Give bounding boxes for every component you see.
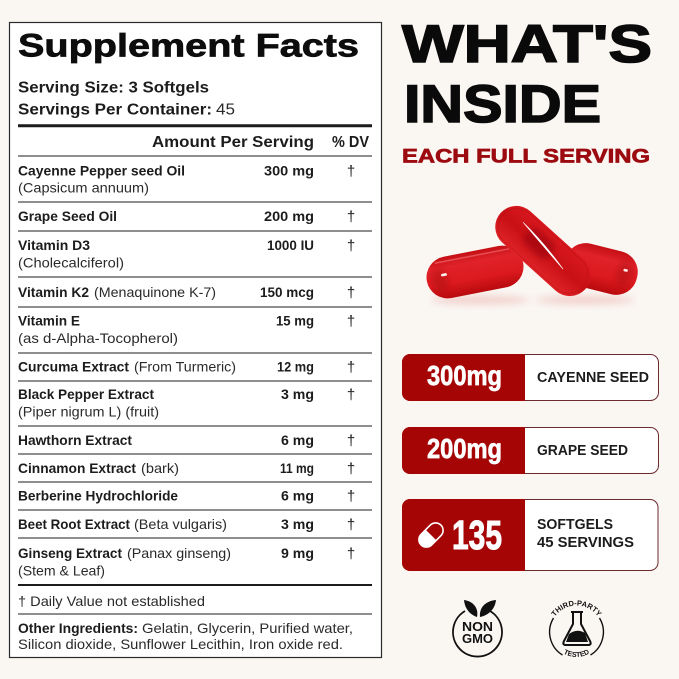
heading: Supplement Facts: Supplement Facts <box>18 28 359 64</box>
stat badge: 135 softgels 45 servings: SOFTGELS <box>537 517 613 533</box>
row: hawthorn extract: 6 mg <box>281 432 314 448</box>
table column headers: % DV <box>332 134 370 151</box>
heading: What's Inside <box>402 15 652 134</box>
row: ginseng extract: † <box>347 546 355 562</box>
panel: supplement facts <box>10 22 382 658</box>
row: ginseng extract: (Stem & Leaf) <box>18 562 105 578</box>
row: vitamin d3: (Cholecalciferol) <box>18 254 124 270</box>
row: beet root extract <box>18 516 355 534</box>
serving information: Servings Per Container: <box>18 102 212 118</box>
stat badge: 300mg cayenne seed <box>402 354 658 401</box>
row: vitamin k2: Vitamin K2 <box>18 284 89 300</box>
row: vitamin e: 15 mg <box>276 312 314 328</box>
stat badge: 200mg grape seed: 200mg <box>427 433 502 464</box>
row: grape seed oil: † <box>347 208 355 226</box>
icon: non-GMO badge: NON <box>462 619 493 634</box>
heading: What's Inside: INSIDE <box>404 75 601 134</box>
row: grape seed oil: Grape Seed Oil <box>18 208 117 224</box>
stat badge: 300mg cayenne seed: CAYENNE SEED <box>537 370 649 386</box>
row: beet root extract: 3 mg <box>281 516 314 532</box>
row: cinnamon extract: † <box>347 460 355 478</box>
stat badge: 300mg cayenne seed: 300mg <box>427 360 502 391</box>
row: black pepper extract: 3 mg <box>281 386 314 402</box>
stat badge: 135 softgels 45 servings: 45 SERVINGS <box>537 535 634 551</box>
row: hawthorn extract <box>18 432 355 450</box>
row: hawthorn extract: † <box>347 432 355 450</box>
row: vitamin d3: Vitamin D3 <box>18 237 90 253</box>
stat badge: 200mg grape seed: GRAPE SEED <box>537 443 628 459</box>
serving information: Serving Size: 3 Softgels <box>18 80 209 96</box>
icon: non-GMO badge <box>453 600 502 657</box>
row: black pepper extract: † <box>347 386 355 404</box>
row: cinnamon extract: (bark) <box>141 460 179 476</box>
row: vitamin e <box>18 312 355 346</box>
stat badge: 135 softgels 45 servings: 135 <box>452 512 502 558</box>
row: grape seed oil: 200 mg <box>264 208 314 224</box>
row: cinnamon extract: Cinnamon Extract <box>18 460 136 476</box>
row: ginseng extract <box>18 545 355 578</box>
row: grape seed oil <box>18 208 355 226</box>
row: vitamin e: † <box>347 313 355 330</box>
row: beet root extract: Beet Root Extract <box>18 516 130 532</box>
stat badge: 135 softgels 45 servings <box>402 499 658 571</box>
icon: non-GMO badge: GMO <box>462 631 493 646</box>
softgel capsules image <box>423 197 642 305</box>
row: cinnamon extract <box>18 460 355 478</box>
row: vitamin k2: 150 mcg <box>260 284 314 300</box>
row: berberine hydrochloride <box>18 488 355 505</box>
icon: capsule <box>416 520 446 550</box>
row: ginseng extract: 9 mg <box>281 545 314 561</box>
row: beet root extract: † <box>347 516 355 534</box>
row: curcuma extract <box>18 358 355 376</box>
icon: third-party tested badge: TESTED <box>564 649 589 657</box>
row: berberine hydrochloride: 6 mg <box>281 488 314 504</box>
other ingredients: Other Ingredients: <box>18 620 138 636</box>
row: ginseng extract: (Panax ginseng) <box>127 545 231 561</box>
row: vitamin k2 <box>18 284 355 302</box>
row: curcuma extract: 12 mg <box>277 358 314 374</box>
serving information <box>18 80 235 118</box>
row: curcuma extract: (From Turmeric) <box>134 358 236 374</box>
icon: third-party tested badge <box>548 600 604 657</box>
row: black pepper extract: Black Pepper Extract <box>18 386 154 402</box>
row: cayenne pepper seed oil: 300 mg <box>264 162 314 178</box>
other ingredients: Gelatin, Glycerin, Purified water, <box>142 620 353 636</box>
row: vitamin k2: (Menaquinone K-7) <box>94 284 216 300</box>
row: curcuma extract: † <box>347 359 355 376</box>
row: cinnamon extract: 11 mg <box>280 460 314 476</box>
row: beet root extract: (Beta vulgaris) <box>134 516 227 532</box>
subheading: each full serving: EACH FULL SERVING <box>402 146 650 168</box>
other ingredients: Silicon dioxide, Sunflower Lecithin, Iron oxide red. <box>18 636 343 652</box>
row: berberine hydrochloride: † <box>347 488 355 505</box>
table column headers: Amount Per Serving <box>152 134 314 151</box>
row: vitamin e: (as d-Alpha-Tocopherol) <box>18 330 178 346</box>
row: cayenne pepper seed oil <box>18 162 355 196</box>
row: vitamin k2: † <box>347 284 355 302</box>
stat badge: 200mg grape seed <box>402 427 658 474</box>
row: ginseng extract: Ginseng Extract <box>18 545 122 561</box>
row: black pepper extract <box>18 386 355 420</box>
icon: third-party tested badge: THIRD-PARTY <box>550 600 602 616</box>
row: curcuma extract: Curcuma Extract <box>18 358 129 374</box>
row: cayenne pepper seed oil: (Capsicum annuum) <box>18 180 149 196</box>
row: hawthorn extract: Hawthorn Extract <box>18 432 132 448</box>
heading: What's Inside: WHAT'S <box>402 15 652 74</box>
serving information: 45 <box>216 102 235 118</box>
row: vitamin d3 <box>18 237 355 270</box>
row: vitamin e: Vitamin E <box>18 312 80 328</box>
row: black pepper extract: (Piper nigrum L) (fruit) <box>18 404 159 420</box>
row: vitamin d3: † <box>347 238 355 254</box>
row: cayenne pepper seed oil: Cayenne Pepper seed Oil <box>18 162 185 178</box>
row: vitamin d3: 1000 IU <box>267 237 314 253</box>
table column headers <box>152 134 370 151</box>
other ingredients <box>18 620 353 652</box>
row: cayenne pepper seed oil: † <box>347 163 355 180</box>
footnote: daily value: † Daily Value not established <box>18 593 205 609</box>
row: berberine hydrochloride: Berberine Hydrochloride <box>18 488 178 504</box>
